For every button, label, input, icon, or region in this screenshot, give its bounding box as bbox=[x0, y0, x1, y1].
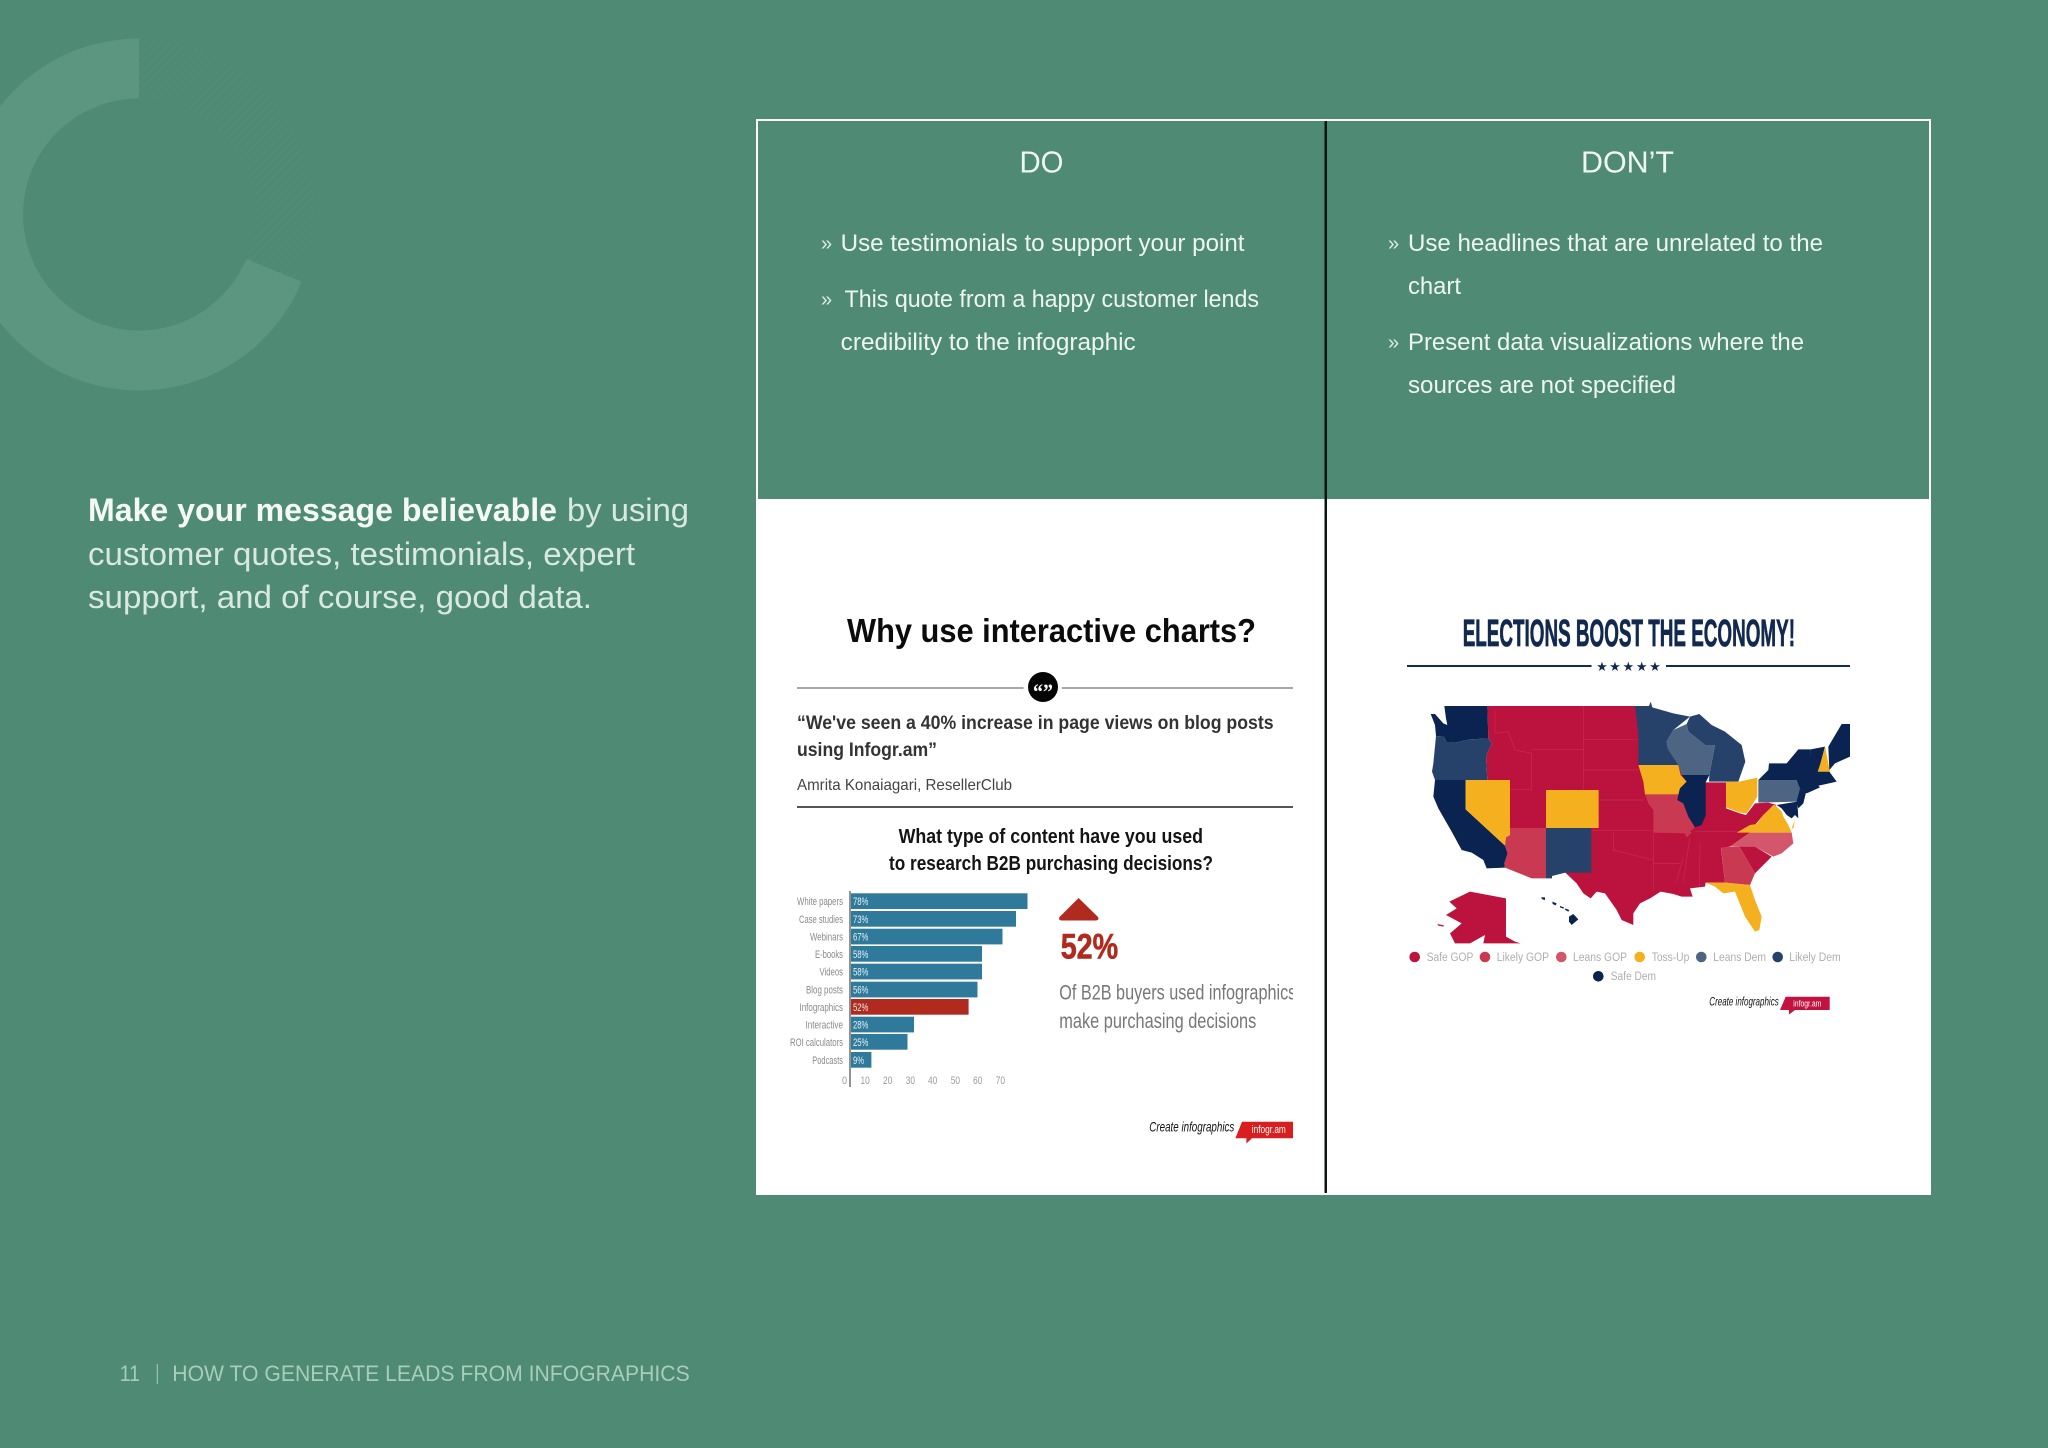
star divider: ★ bbox=[1609, 660, 1621, 675]
map legend: Likely Dem bbox=[1789, 952, 1841, 964]
decorative donut chart bbox=[0, 38, 315, 390]
customer quote: “We've seen a 40% increase in page views on blog posts bbox=[797, 712, 1274, 734]
bar chart: content types: 25% bbox=[853, 1037, 869, 1049]
infogram credit badge: Create infographics bbox=[1709, 994, 1779, 1008]
intro text block: Make your message believable bbox=[88, 492, 557, 528]
bar chart: content types: 56% bbox=[853, 984, 869, 996]
chart question heading: to research B2B purchasing decisions? bbox=[889, 853, 1213, 875]
infogram credit badge: Create infographics bbox=[1149, 1118, 1234, 1134]
quote divider with icon bbox=[797, 672, 1293, 704]
don't list: chart bbox=[1408, 273, 1461, 300]
don't list bbox=[1388, 230, 1823, 399]
do list: » bbox=[821, 289, 832, 311]
do example: why use interactive charts infographic bbox=[790, 612, 1296, 1144]
chart title: Why use interactive charts? bbox=[847, 612, 1256, 649]
chart question heading: What type of content have you used bbox=[899, 826, 1203, 848]
map legend: Toss-Up bbox=[1652, 952, 1689, 964]
map: US states by rating bbox=[1431, 702, 1850, 943]
bar chart: content types: Videos bbox=[820, 966, 843, 978]
customer quote: Amrita Konaiagari, ResellerClub bbox=[797, 777, 1012, 794]
footer page label: HOW TO GENERATE LEADS FROM INFOGRAPHICS bbox=[172, 1361, 690, 1386]
bar chart: content types: Blog posts bbox=[806, 984, 843, 996]
don't example: elections boost the economy infographic bbox=[1407, 613, 1850, 1014]
bar chart: content types: 0 bbox=[842, 1075, 847, 1087]
map legend: Leans GOP bbox=[1573, 952, 1627, 964]
star divider: ★ bbox=[1649, 660, 1661, 675]
bar chart: content types: 50 bbox=[951, 1075, 960, 1087]
heading: don't: DON’T bbox=[1581, 144, 1674, 180]
don't list: Present data visualizations where the bbox=[1408, 329, 1804, 356]
bar chart: content types: Webinars bbox=[810, 932, 843, 944]
infogram credit badge: infogr.am bbox=[1252, 1124, 1286, 1136]
map legend: Leans Dem bbox=[1713, 952, 1766, 964]
star divider: ★ bbox=[1622, 660, 1634, 675]
stat description bbox=[1059, 982, 1296, 1033]
panel: do and don't comparison table bbox=[757, 120, 1930, 1195]
do list bbox=[821, 230, 1259, 356]
do list: credibility to the infographic bbox=[841, 329, 1136, 356]
don't list: » bbox=[1388, 332, 1399, 354]
star divider: ★ bbox=[1596, 660, 1608, 675]
chart question heading bbox=[889, 826, 1213, 875]
bar chart: content types: 40 bbox=[928, 1075, 937, 1087]
bar chart: content types: 67% bbox=[853, 932, 869, 944]
bar chart: content types: White papers bbox=[797, 896, 843, 908]
stat description: make purchasing decisions bbox=[1059, 1010, 1256, 1033]
map legend: Safe Dem bbox=[1611, 971, 1656, 983]
do list: Use testimonials to support your point bbox=[841, 230, 1245, 257]
bar chart: content types: Case studies bbox=[799, 914, 843, 926]
eastern states bbox=[1635, 702, 1850, 932]
star divider bbox=[1407, 660, 1850, 675]
bar chart: content types: 58% bbox=[853, 966, 869, 978]
map legend bbox=[1409, 952, 1841, 983]
intro text block: support, and of course, good data. bbox=[88, 579, 592, 615]
bar chart: content types: 28% bbox=[853, 1020, 869, 1032]
bar chart: content types: 70 bbox=[996, 1075, 1005, 1087]
bar chart: content types: Podcasts bbox=[812, 1055, 843, 1067]
don't list: » bbox=[1388, 233, 1399, 255]
infogram credit badge: infogr.am bbox=[1793, 998, 1821, 1008]
customer quote bbox=[797, 712, 1274, 794]
bar chart: content types: 58% bbox=[853, 949, 869, 961]
icon: up arrow bbox=[1059, 898, 1098, 920]
star divider: ★ bbox=[1636, 660, 1648, 675]
bar chart: content types: ROI calculators bbox=[790, 1037, 843, 1049]
intro text block bbox=[88, 492, 689, 615]
footer page label: 11 bbox=[120, 1361, 140, 1386]
bar chart: content types: 9% bbox=[853, 1055, 864, 1067]
bar chart: content types: 20 bbox=[883, 1075, 892, 1087]
infogram credit badge bbox=[1149, 1118, 1293, 1144]
stat: 52 percent: 52% bbox=[1061, 928, 1118, 966]
bar chart: content types: 10 bbox=[860, 1075, 870, 1087]
heading: do: DO bbox=[1020, 144, 1064, 180]
map legend: Safe GOP bbox=[1427, 952, 1474, 964]
intro text block: customer quotes, testimonials, expert bbox=[88, 536, 635, 572]
bar chart: content types: 73% bbox=[853, 914, 869, 926]
quote divider with icon: “” bbox=[1033, 679, 1053, 704]
bar chart: content types bbox=[790, 891, 1028, 1087]
bar chart: content types: 52% bbox=[853, 1002, 869, 1014]
bar chart: content types: 78% bbox=[853, 896, 869, 908]
bar chart: content types: 30 bbox=[906, 1075, 915, 1087]
bar chart: content types: E-books bbox=[815, 949, 843, 961]
infogram credit badge bbox=[1709, 994, 1830, 1014]
Alaska bbox=[1446, 892, 1521, 943]
don't list: Use headlines that are unrelated to the bbox=[1408, 230, 1823, 257]
map legend: Likely GOP bbox=[1497, 952, 1549, 964]
do list: » bbox=[821, 233, 832, 255]
stat description: Of B2B buyers used infographics bbox=[1059, 982, 1296, 1004]
do list: This quote from a happy customer lends bbox=[844, 286, 1259, 313]
intro text block: by using bbox=[567, 492, 689, 528]
bar chart: content types: 60 bbox=[973, 1075, 982, 1087]
customer quote: using Infogr.am” bbox=[797, 739, 937, 761]
bar chart: content types: Infographics bbox=[800, 1002, 843, 1014]
Hawaii bbox=[1541, 897, 1578, 925]
bar chart: content types: Interactive bbox=[806, 1020, 843, 1032]
don't list: sources are not specified bbox=[1408, 372, 1676, 399]
